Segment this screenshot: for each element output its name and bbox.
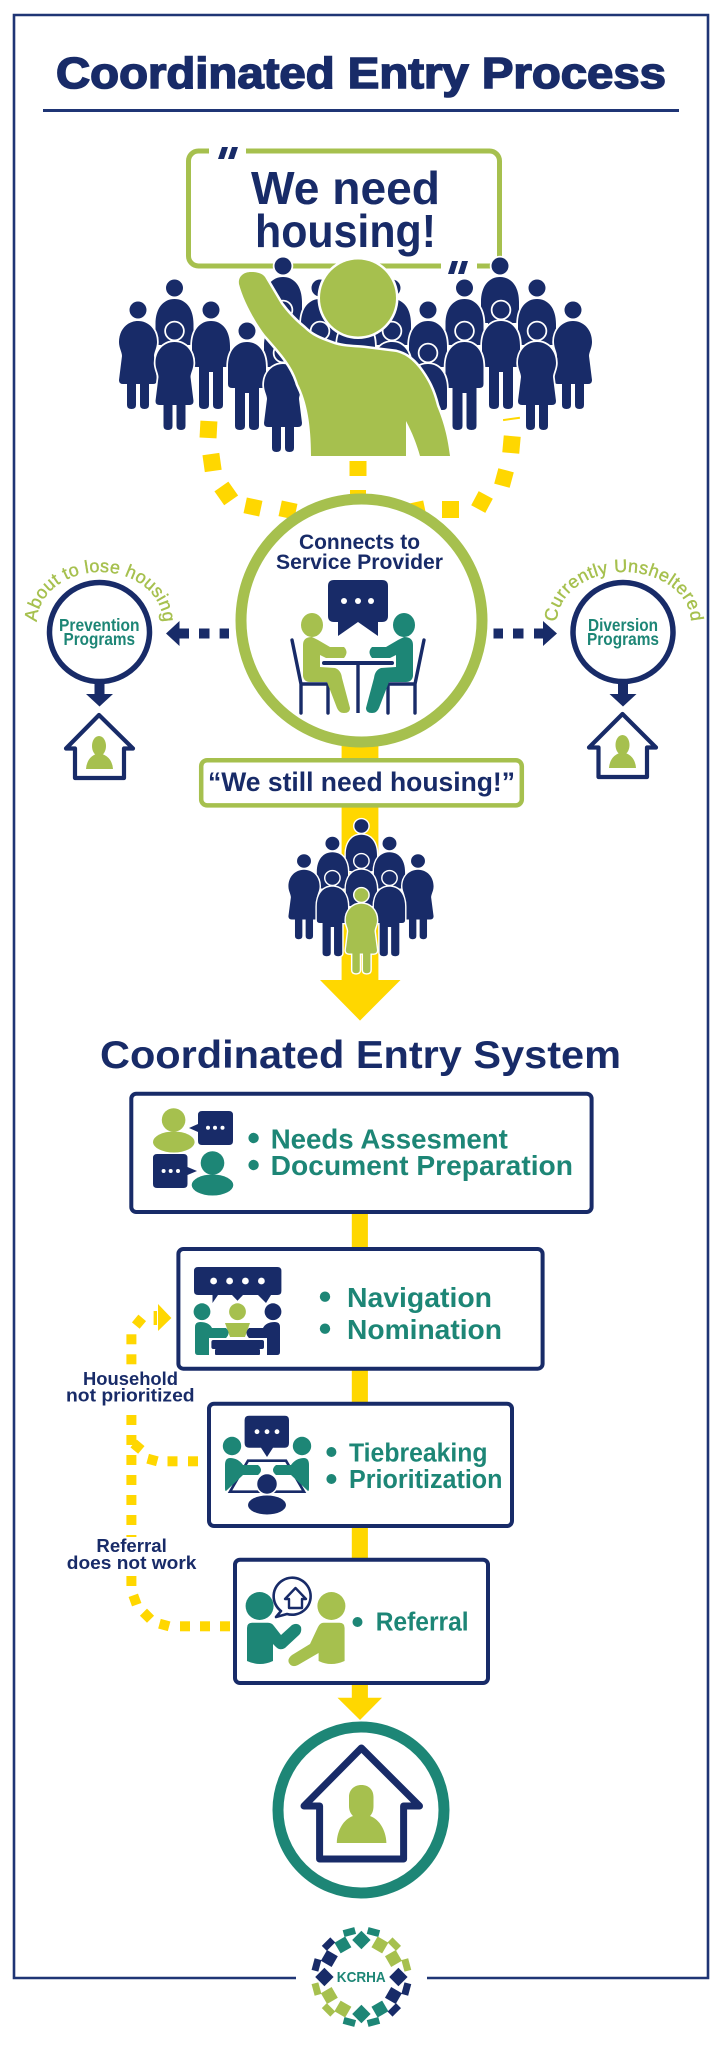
speech box: We need housing: We need: [251, 162, 440, 214]
dashed feedback path: [126, 1304, 230, 1631]
panel: connects to service provider: Connects to: [299, 531, 420, 554]
arrow: dotted left to prevention: [166, 621, 229, 646]
panel: navigation and nomination: [178, 1249, 543, 1369]
label: referral does not work: [67, 1536, 197, 1573]
panel: navigation and nomination: Navigation: [347, 1282, 492, 1313]
label: currently unsheltered: Currently Unsheltered: [544, 559, 704, 621]
icon: referral handshake: [246, 1578, 345, 1666]
arrow: diversion to house: [610, 682, 636, 706]
panel: tiebreaking and prioritization: Prioritization: [349, 1466, 502, 1494]
yellow dashed arc to service provider: [200, 417, 521, 519]
panel: connects to service provider: Service Provider: [276, 551, 443, 574]
panel: navigation and nomination: Nomination: [347, 1314, 502, 1345]
speech box: We need housing: housing!: [255, 205, 436, 257]
panel: referral: [235, 1560, 488, 1683]
panel: needs assessment: Needs Assesment: [271, 1123, 508, 1154]
panel: diversion programs: Diversion: [588, 615, 658, 635]
yellow connector with arrow: [338, 1210, 382, 1720]
icon: housed person in circle: [278, 1727, 444, 1893]
label: household not prioritized: not prioritized: [66, 1386, 195, 1406]
icon: tiebreaking table: [223, 1416, 311, 1514]
icon: house with person right: [589, 714, 656, 777]
icon: two people meeting at a table: [292, 580, 424, 713]
label: household not prioritized: [66, 1369, 195, 1406]
callout: we still need housing: “We still need housing!”: [208, 767, 515, 797]
icon: two people talking: [153, 1108, 233, 1196]
arrow: prevention to house: [86, 682, 113, 706]
panel: referral: Referral: [376, 1609, 469, 1637]
main figure raising hand: [239, 260, 450, 456]
speech box: We need housing: [188, 145, 500, 274]
panel: prevention programs: Prevention: [59, 615, 140, 635]
logo: KCRHA: KCRHA: [337, 1969, 386, 1986]
crowd of people: [119, 258, 592, 452]
panel: tiebreaking and prioritization: Tiebreaking: [349, 1440, 488, 1468]
panel: tiebreaking and prioritization: [209, 1404, 512, 1526]
label: referral does not work: does not work: [67, 1553, 197, 1573]
small crowd with green person: [288, 819, 434, 973]
panel: needs assessment: Document Preparation: [271, 1150, 573, 1181]
callout: we still need housing: [201, 760, 522, 805]
panel: diversion programs: [544, 559, 704, 684]
panel: prevention programs: [24, 560, 173, 684]
title: Coordinated Entry Process: [56, 49, 666, 98]
label: household not prioritized: Household: [83, 1369, 178, 1389]
arrow: dotted right to diversion: [494, 621, 557, 646]
yellow column with arrow: [320, 740, 400, 1021]
logo: KCRHA: [312, 1927, 411, 2027]
panel: prevention programs: Programs: [64, 629, 135, 649]
panel: diversion programs: Programs: [587, 629, 659, 649]
label: about to lose housing: About to lose housing: [24, 560, 173, 622]
panel: connects to service provider: [241, 499, 482, 742]
panel: needs assessment: [131, 1094, 592, 1212]
label: referral does not work: Referral: [96, 1536, 167, 1556]
icon: navigation meeting: [194, 1267, 281, 1355]
heading: coordinated entry system: Coordinated Entry System: [100, 1034, 621, 1077]
icon: house with person left: [66, 715, 133, 778]
